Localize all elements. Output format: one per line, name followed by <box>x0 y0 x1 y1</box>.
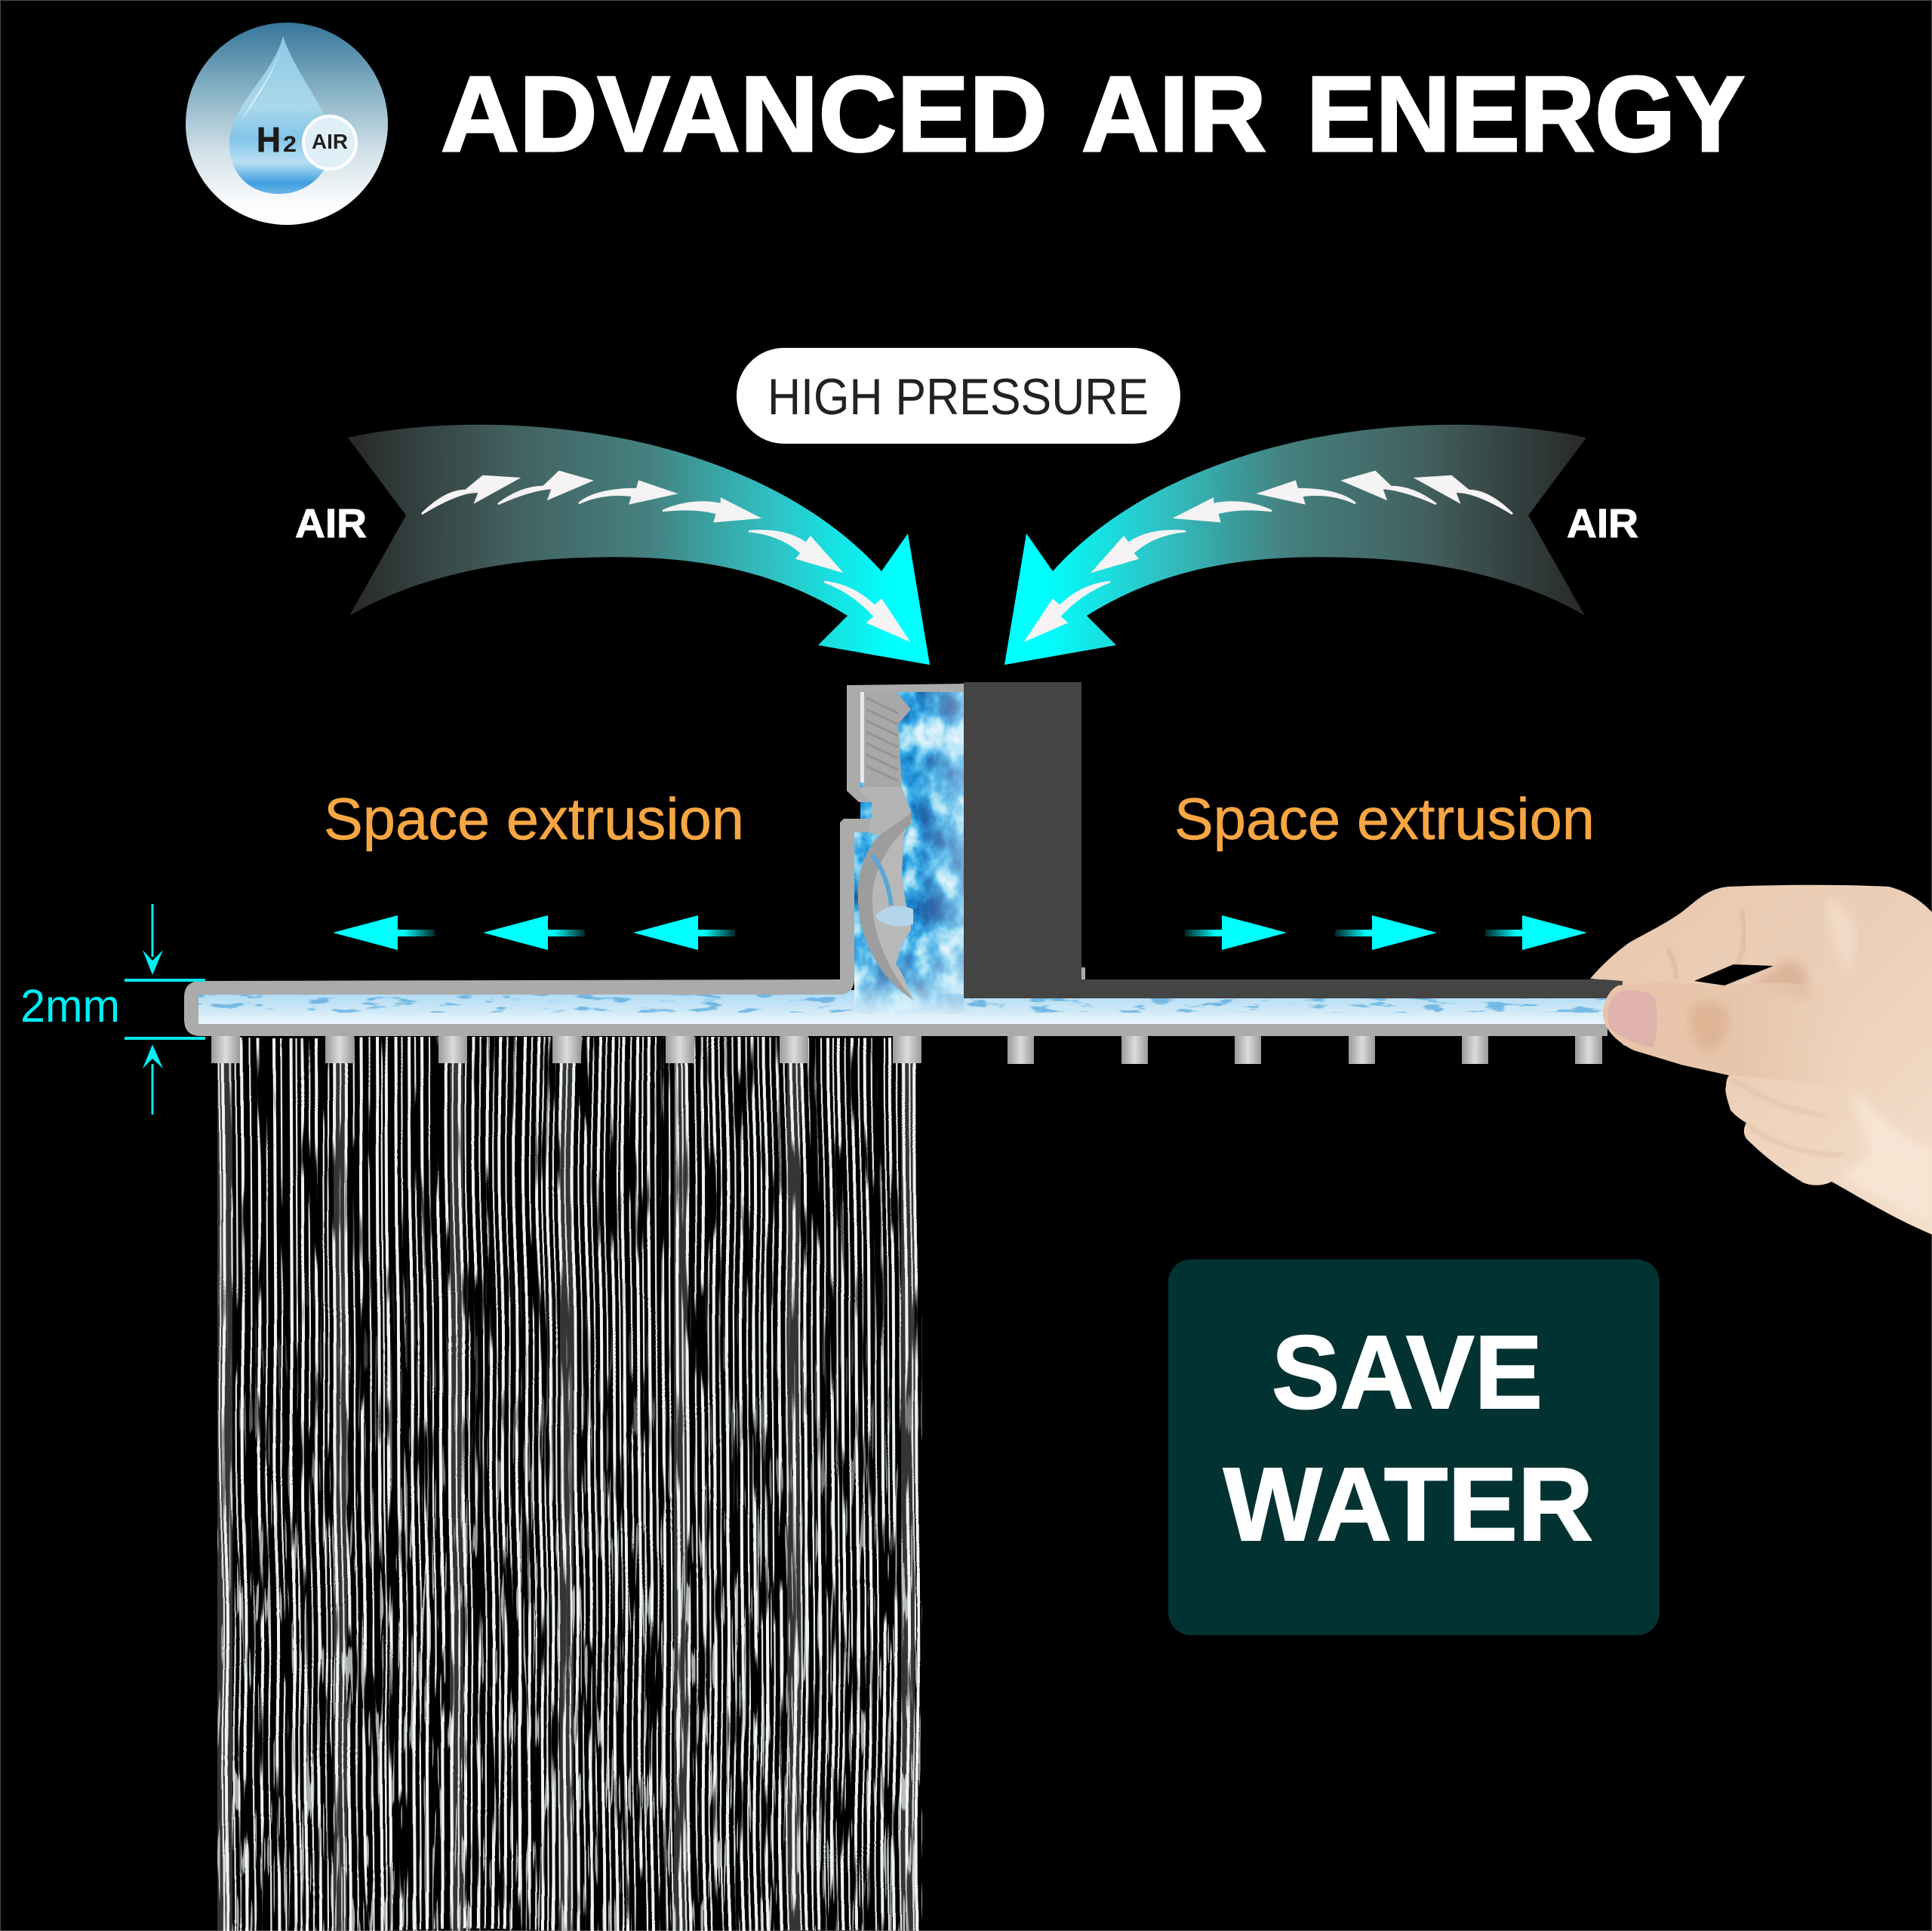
air bubble label: AIR <box>312 130 348 153</box>
H2 label: H <box>257 120 281 159</box>
high pressure pill <box>737 348 1180 444</box>
water label: WATER <box>1223 1447 1593 1563</box>
pale water fade at bottom of cavity <box>854 936 964 1016</box>
falling water streams <box>217 1037 922 1931</box>
dark top plate <box>964 979 1623 998</box>
deflector inner <box>858 813 913 1000</box>
title: ADVANCED <box>441 54 1048 174</box>
grey columns below nozzles <box>217 1063 915 1931</box>
title: ENERGY <box>1306 54 1745 174</box>
nozzles <box>211 1036 1602 1064</box>
knuckle wrinkles <box>1690 1002 1728 1053</box>
hand: thumb <box>1603 982 1864 1087</box>
water in bar <box>192 990 1615 1028</box>
arrow: right air flow <box>1004 425 1586 665</box>
upper limit line <box>125 979 205 982</box>
arrow: left air flow <box>348 425 930 665</box>
title: AIR <box>1081 54 1266 174</box>
threaded insert <box>864 692 911 787</box>
lower grey wall and bar shell <box>184 819 1607 1036</box>
dark inlet block <box>964 682 1081 998</box>
air bubble <box>303 116 356 169</box>
save label: SAVE <box>1272 1314 1543 1431</box>
shower head body <box>184 682 1623 1064</box>
bar water texture <box>198 995 1607 1013</box>
left pushing arrows <box>333 915 735 950</box>
logo badge: H2 + AIR water drop <box>186 23 388 225</box>
AIR label right: AIR <box>1567 501 1638 546</box>
hand: fingers and palm <box>1590 885 1932 1235</box>
up arrow <box>143 1044 163 1115</box>
icon: water drop <box>229 36 332 194</box>
main water lines <box>223 1037 918 1931</box>
thumbnail <box>1608 990 1657 1047</box>
hand shading <box>1668 898 1932 1222</box>
2mm thickness dimension <box>20 904 205 1115</box>
down arrow <box>143 904 163 975</box>
2mm label: 2mm <box>20 980 120 1032</box>
space extrusion label right: Space extrusion <box>1174 786 1595 852</box>
small grey sliver <box>1081 967 1085 979</box>
thread grooves <box>866 698 898 781</box>
title <box>441 54 1745 174</box>
drop highlight <box>242 42 283 121</box>
right pushing arrows <box>1185 915 1587 950</box>
grey neck <box>860 787 911 835</box>
AIR label left: AIR <box>295 501 367 546</box>
water splash <box>875 906 913 927</box>
water jet streak <box>872 855 891 906</box>
gap between finger and thumb <box>1694 964 1774 985</box>
high pressure label: HIGH PRESSURE <box>768 368 1149 426</box>
curved deflector band <box>858 813 913 1000</box>
fine lower droplets <box>217 1261 922 1931</box>
water in inlet cavity <box>854 692 964 1015</box>
space extrusion label left: Space extrusion <box>324 786 744 852</box>
save water panel <box>1168 1259 1660 1635</box>
white strip beside thread <box>860 692 864 783</box>
paler water on right side of cavity <box>913 692 964 994</box>
thin water lines <box>219 1037 915 1931</box>
subscript 2: 2 <box>283 132 297 157</box>
small white flow arrows <box>1026 472 1512 640</box>
upper grey wall <box>847 684 964 802</box>
small white flow arrows <box>422 472 908 640</box>
lower limit line <box>125 1037 205 1040</box>
